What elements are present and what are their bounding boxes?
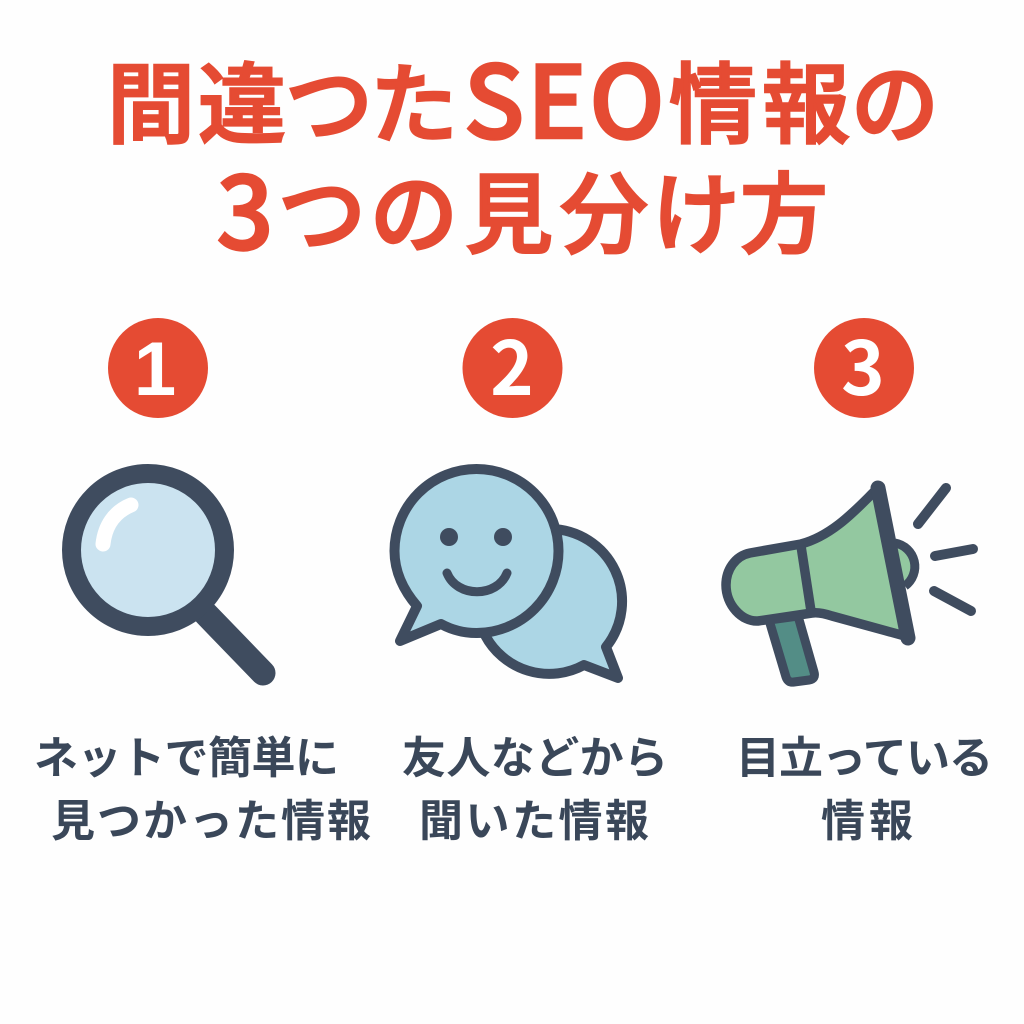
title: た (370, 35, 458, 162)
label 1: 見つかった情報 (51, 785, 371, 849)
title: 違 (198, 35, 286, 162)
number badge 3 (814, 310, 914, 418)
title: S (464, 22, 524, 167)
number badge 2: 2 (490, 310, 534, 417)
label 1 (34, 722, 371, 849)
icon: magnifying glass (72, 474, 263, 673)
title: 間 (107, 35, 195, 162)
title: つ (278, 145, 366, 272)
title: 分 (560, 145, 648, 272)
label 2: 友人などから (402, 722, 668, 786)
title: つ (285, 35, 373, 162)
title: 見 (465, 145, 553, 272)
title: 3 (216, 133, 274, 278)
number badge 1: 1 (134, 327, 176, 412)
icon: speech bubbles (394, 469, 622, 678)
title: 報 (762, 35, 850, 162)
label 3: 目立っている (736, 722, 993, 786)
label 3 (736, 722, 993, 849)
title: 方 (740, 145, 828, 272)
label 2: 聞いた情報 (419, 785, 649, 849)
number badge 2 (462, 310, 562, 418)
title: の (851, 35, 939, 162)
label 1: ネットで簡単に (34, 722, 339, 786)
title: の (370, 145, 458, 272)
number badge 3: 3 (841, 310, 885, 417)
title: 情 (669, 35, 757, 162)
title: O (589, 22, 665, 167)
title (107, 22, 939, 278)
number badge 1 (108, 318, 208, 418)
label 3: 情報 (821, 785, 913, 849)
title: け (652, 145, 740, 272)
title: E (527, 22, 587, 167)
icon: megaphone (726, 488, 973, 682)
label 2 (402, 722, 668, 849)
